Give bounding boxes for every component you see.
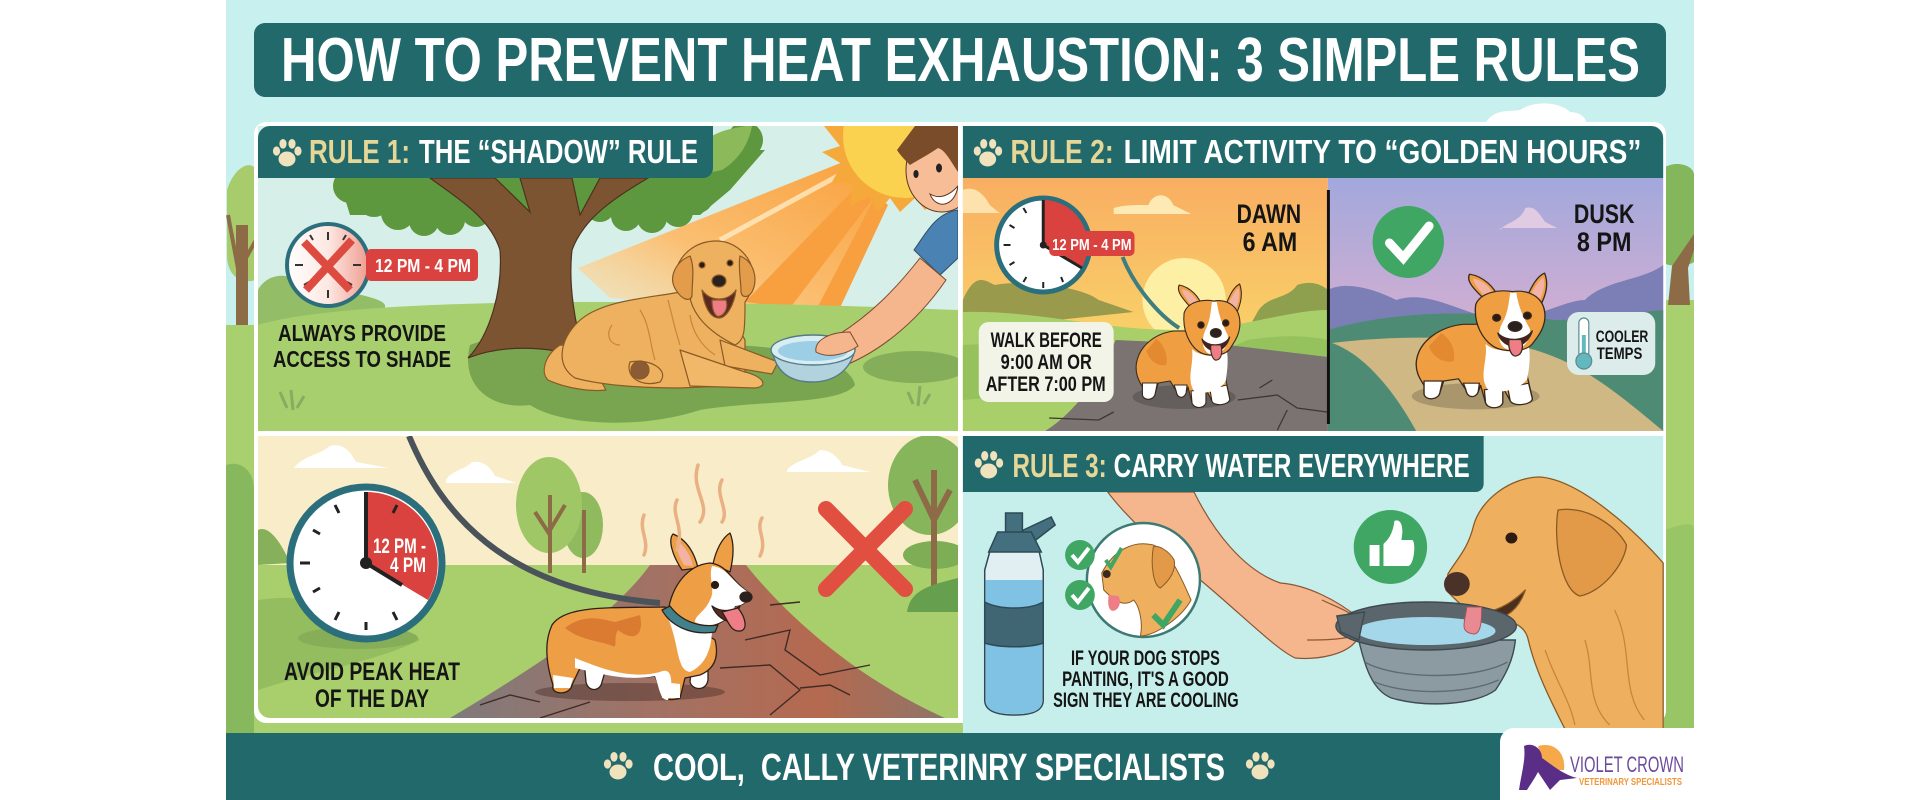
clock label: 4 PM xyxy=(390,554,426,577)
panel: avoid peak heat xyxy=(258,435,972,718)
clouds xyxy=(294,445,870,483)
header: rule 3 xyxy=(963,436,1484,492)
panting caption: IF YOUR DOG STOPS xyxy=(1071,647,1220,670)
header: rule 1 xyxy=(258,126,713,178)
arm and hand xyxy=(1108,492,1359,658)
dawn label: DAWN xyxy=(1237,199,1301,229)
large clock xyxy=(290,487,442,649)
corgi dusk xyxy=(1412,273,1547,409)
water bottle xyxy=(985,513,1055,715)
paw icon xyxy=(975,451,1003,478)
grass tufts xyxy=(280,386,930,410)
peak heat caption: OF THE DAY xyxy=(315,685,429,713)
walk callout: WALK BEFORE xyxy=(991,329,1102,352)
dusk label: 8 PM xyxy=(1577,227,1631,257)
peak heat caption: AVOID PEAK HEAT xyxy=(284,658,460,686)
logo tagline: VETERINARY SPECIALISTS xyxy=(1579,777,1682,788)
leash xyxy=(409,436,660,603)
logo xyxy=(1500,728,1694,800)
ground xyxy=(258,565,958,718)
background trees xyxy=(516,457,603,573)
background bushes xyxy=(258,276,385,330)
clock label xyxy=(374,538,426,572)
peak heat caption xyxy=(284,662,460,707)
shade caption xyxy=(274,325,450,367)
tongue xyxy=(1464,607,1482,634)
golden retriever drinking xyxy=(1446,477,1663,733)
dawn leash xyxy=(1123,257,1179,328)
panting caption: SIGN THEY ARE COOLING xyxy=(1053,689,1239,712)
dawn label xyxy=(1237,199,1301,257)
rule 1 label: RULE 1: xyxy=(309,133,410,170)
thermometer xyxy=(1576,318,1592,369)
dawn clock xyxy=(997,198,1090,292)
shade on grass xyxy=(468,335,855,423)
panel: rule 2 golden hours xyxy=(963,178,1663,431)
dawn scene xyxy=(963,178,1328,431)
dog checks badge xyxy=(1087,523,1200,637)
shade caption: ALWAYS PROVIDE xyxy=(278,320,446,346)
sun rays xyxy=(578,160,885,312)
collapsible bowl xyxy=(1336,602,1516,704)
dawn time pill xyxy=(1049,231,1134,256)
infographic canvas xyxy=(226,0,1694,800)
shade caption: ACCESS TO SHADE xyxy=(273,346,451,372)
eye and nose xyxy=(1444,532,1517,596)
header: rule 2 xyxy=(963,126,1663,178)
heat waves xyxy=(642,465,763,556)
logo sun xyxy=(1538,745,1564,770)
dawn label: 6 AM xyxy=(1243,227,1297,257)
time pill xyxy=(366,249,478,281)
panel: rule 3 carry water xyxy=(963,436,1663,733)
paw icon xyxy=(273,139,302,166)
sun xyxy=(822,126,928,212)
rule 2 label: RULE 2: xyxy=(1011,133,1114,170)
panting caption: PANTING, IT'S A GOOD xyxy=(1062,668,1229,691)
walk callout: AFTER 7:00 PM xyxy=(986,373,1106,396)
footer xyxy=(226,733,1694,800)
check badge xyxy=(1373,206,1444,278)
corgi overheating xyxy=(535,533,752,701)
panting caption xyxy=(1053,647,1239,712)
rule 3 label: RULE 3: xyxy=(1012,447,1107,484)
dusk label: DUSK xyxy=(1574,199,1635,229)
man xyxy=(842,126,958,364)
logo wordmark: VIOLET CROWN xyxy=(1570,752,1684,777)
paw icon xyxy=(974,139,1002,166)
road xyxy=(450,565,945,718)
green checks xyxy=(1065,540,1095,610)
grass xyxy=(258,302,958,431)
dusk label xyxy=(1574,199,1635,257)
red x xyxy=(826,509,905,589)
cooler temps callout: COOLER xyxy=(1596,327,1648,346)
thumbs up badge xyxy=(1354,510,1427,584)
rule 3 heading: CARRY WATER EVERYWHERE xyxy=(1114,447,1470,484)
cooler temps callout: TEMPS xyxy=(1597,344,1642,363)
time pill: 12 PM - 4 PM xyxy=(375,256,471,276)
rule 1 heading: THE “SHADOW” RULE xyxy=(419,133,698,170)
title banner xyxy=(254,23,1666,97)
cooler temps callout xyxy=(1567,312,1655,375)
golden retriever lying xyxy=(544,241,778,391)
rule 2 heading: LIMIT ACTIVITY TO “GOLDEN HOURS” xyxy=(1124,133,1641,170)
panel frame xyxy=(254,122,1666,723)
dusk scene xyxy=(1328,178,1663,431)
panel: rule 1 shadow rule xyxy=(258,126,958,431)
side tree right xyxy=(1664,164,1694,305)
dusk divider xyxy=(1327,190,1330,424)
water bowl xyxy=(771,335,855,382)
logo animals xyxy=(1519,745,1577,790)
right paw xyxy=(1246,752,1275,780)
side tree left xyxy=(227,165,256,325)
hand xyxy=(816,332,858,355)
clock label: 12 PM - xyxy=(373,535,426,558)
tree xyxy=(330,122,765,358)
walk callout xyxy=(979,322,1114,402)
footer text: COOL, CALLY VETERINRY SPECIALISTS xyxy=(653,747,1225,789)
page background xyxy=(226,0,1694,800)
clock crossed out xyxy=(287,224,369,306)
corgi dawn xyxy=(1133,284,1241,409)
dawn time pill: 12 PM - 4 PM xyxy=(1052,237,1132,254)
walk callout: 9:00 AM OR xyxy=(1001,351,1092,374)
left paw xyxy=(604,752,633,780)
